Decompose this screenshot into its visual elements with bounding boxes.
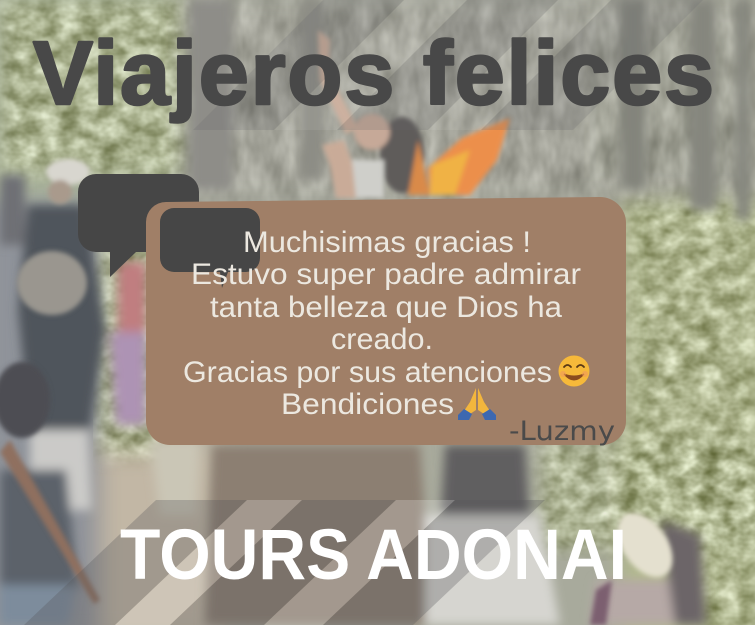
diagonal stripes: bottom <box>24 500 545 625</box>
testimonial text: Bendiciones <box>281 388 454 421</box>
testimonial text: Estuvo super padre admirar <box>191 258 581 291</box>
footer brand name: TOURS ADONAI <box>120 516 627 595</box>
testimonial text: Gracias por sus atenciones <box>183 356 552 389</box>
testimonial background <box>146 197 626 445</box>
panel: testimonial <box>146 197 626 447</box>
testimonial text: Muchisimas gracias ! <box>243 226 531 259</box>
icon: smiling emoji <box>558 356 590 386</box>
testimonial text: tanta belleza que Dios ha <box>210 291 562 324</box>
diagonal stripes: top <box>193 0 703 130</box>
attribution: -Luzmy <box>509 416 615 447</box>
icon: praying hands emoji <box>458 388 496 420</box>
testimonial text: creado. <box>331 323 433 356</box>
testimonial text <box>183 226 581 421</box>
icon: large speech bubble <box>78 174 199 277</box>
butterfly wing colours <box>428 118 510 195</box>
title: Viajeros felices <box>33 24 714 124</box>
icon: small speech bubble <box>160 208 260 288</box>
